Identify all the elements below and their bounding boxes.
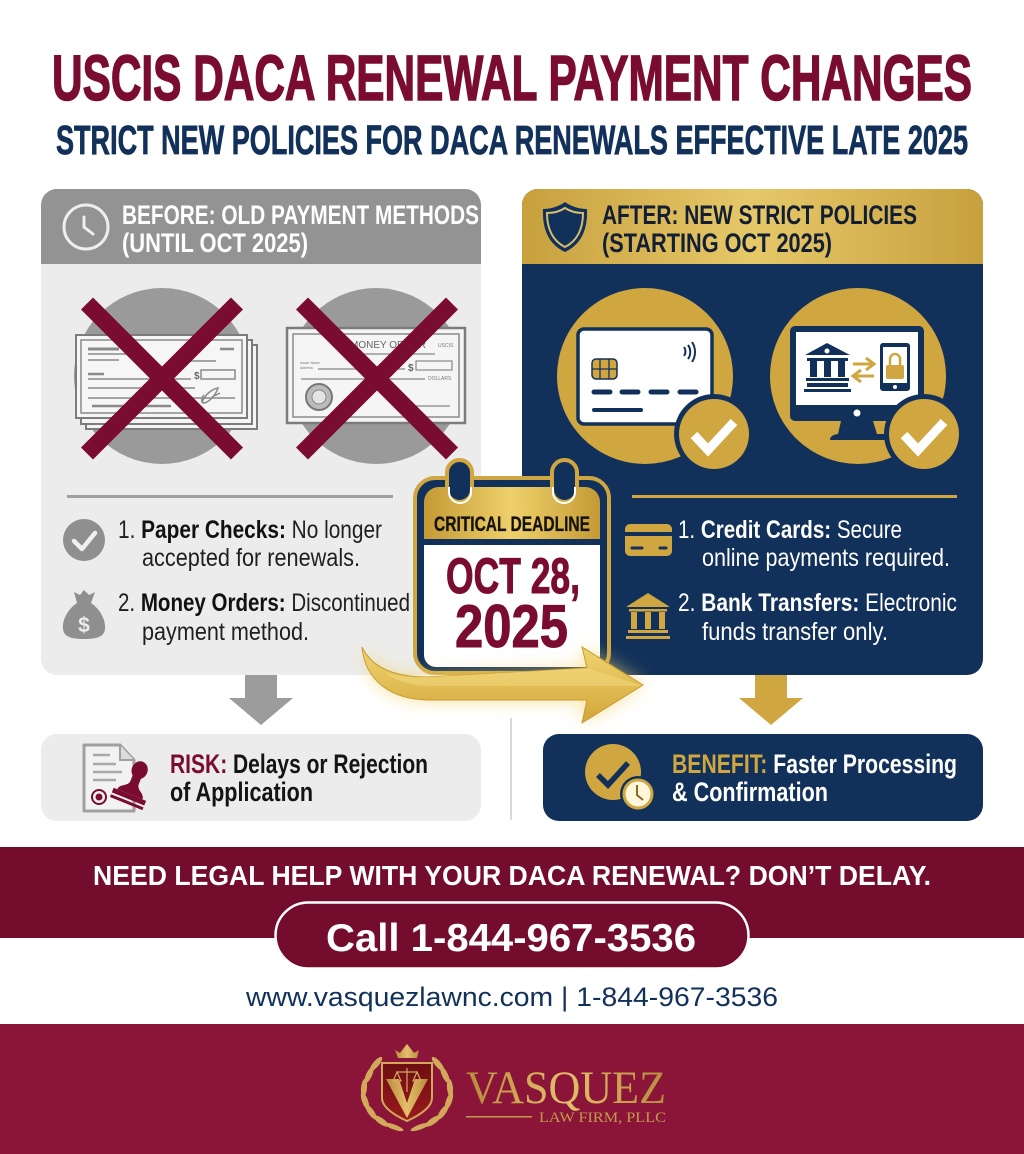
calendar rings: [447, 460, 577, 502]
deadline date: 2025: [455, 593, 568, 660]
text: bank transfers: funds transfer only.: [702, 618, 888, 646]
benefit text: BENEFIT: Faster Processing: [672, 749, 957, 779]
money order illustration: DOLLARS: [428, 376, 452, 382]
text: money orders: payment method.: [142, 618, 309, 646]
icon: shield: [543, 202, 587, 252]
paper checks illustration: $: [194, 371, 200, 382]
phone button: [276, 902, 748, 968]
footer band: [0, 1024, 1024, 1154]
shield: [382, 1063, 432, 1121]
money order illustration: $: [408, 363, 414, 374]
logo emblem: [359, 1044, 455, 1133]
text: credit cards: 1. Credit Cards: Secure: [678, 516, 902, 544]
before heading: (UNTIL OCT 2025): [122, 228, 308, 258]
risk text: RISK: Delays or Rejection: [170, 749, 428, 779]
calendar: critical deadline: [415, 460, 609, 673]
after header band: [522, 189, 983, 264]
text: bank transfers: 2. Bank Transfers: Electronic: [678, 589, 957, 617]
before heading: [122, 200, 479, 258]
bank transfer illustration: [770, 288, 964, 474]
logo wordmark: VASQUEZ: [466, 1062, 666, 1114]
panel: before: [41, 189, 481, 675]
panel: after: [522, 189, 983, 675]
risk text: [170, 749, 428, 807]
text: bank transfers: [678, 589, 957, 646]
vertical divider: [510, 718, 512, 820]
text: money orders: 2. Money Orders: Discontinued: [118, 589, 410, 617]
money order illustration: Issuer Name: [300, 361, 320, 365]
logo wordmark: LAW FIRM, PLLC: [539, 1110, 666, 1126]
icon: card: [625, 524, 672, 556]
icon: gray check: [63, 519, 105, 561]
deadline date: OCT 28,: [446, 548, 580, 604]
paper checks illustration: [74, 288, 257, 464]
website and phone: www.vasquezlawnc.com | 1-844-967-3536: [245, 982, 778, 1012]
risk box: [41, 734, 481, 821]
money order illustration: USCIS: [438, 343, 454, 349]
left laurel: [359, 1055, 404, 1133]
text: paper checks: accepted for renewals.: [142, 544, 360, 572]
right laurel: [410, 1055, 455, 1133]
icon: money bag: $: [78, 614, 90, 637]
crown: [395, 1044, 419, 1058]
call to action text: NEED LEGAL HELP WITH YOUR DACA RENEWAL? DON’T DELAY.: [93, 860, 931, 891]
arrow: down gray: [229, 675, 293, 725]
money order illustration: MONEY OROER: [350, 340, 426, 351]
money order illustration: Address: [300, 366, 313, 370]
credit card illustration: [557, 288, 754, 474]
benefit text: & Confirmation: [672, 777, 828, 807]
icon: check and clock: [585, 744, 656, 812]
arrow: down gold: [739, 675, 803, 725]
risk text: of Application: [170, 777, 313, 807]
right divider: [632, 495, 957, 498]
benefit text: [672, 749, 957, 807]
shield V: [386, 1079, 428, 1118]
after heading: (STARTING OCT 2025): [602, 228, 832, 258]
icon: money bag: [63, 590, 105, 639]
left divider: [67, 495, 393, 498]
scales: [393, 1068, 421, 1092]
text: credit cards: online payments required.: [702, 544, 950, 572]
after heading: AFTER: NEW STRICT POLICIES: [602, 200, 917, 230]
benefit box: [543, 734, 983, 821]
icon: document and stamp: [84, 745, 159, 811]
call to action band: [0, 847, 1024, 968]
text: paper checks: [118, 516, 382, 572]
before heading: BEFORE: OLD PAYMENT METHODS: [122, 200, 479, 230]
text: paper checks: 1. Paper Checks: No longer: [118, 516, 382, 544]
before header band: [41, 189, 481, 264]
arrow: gold transition: [362, 647, 643, 723]
text: credit cards: [678, 516, 950, 572]
money order illustration: [287, 288, 465, 464]
text: money orders: [118, 589, 410, 646]
phone button: Call 1-844-967-3536: [326, 917, 696, 960]
deadline date: [446, 548, 580, 660]
icon: bank: [626, 593, 670, 639]
icon: clock: [64, 205, 108, 249]
calendar heading: CRITICAL DEADLINE: [434, 513, 590, 536]
after heading: [602, 200, 917, 258]
